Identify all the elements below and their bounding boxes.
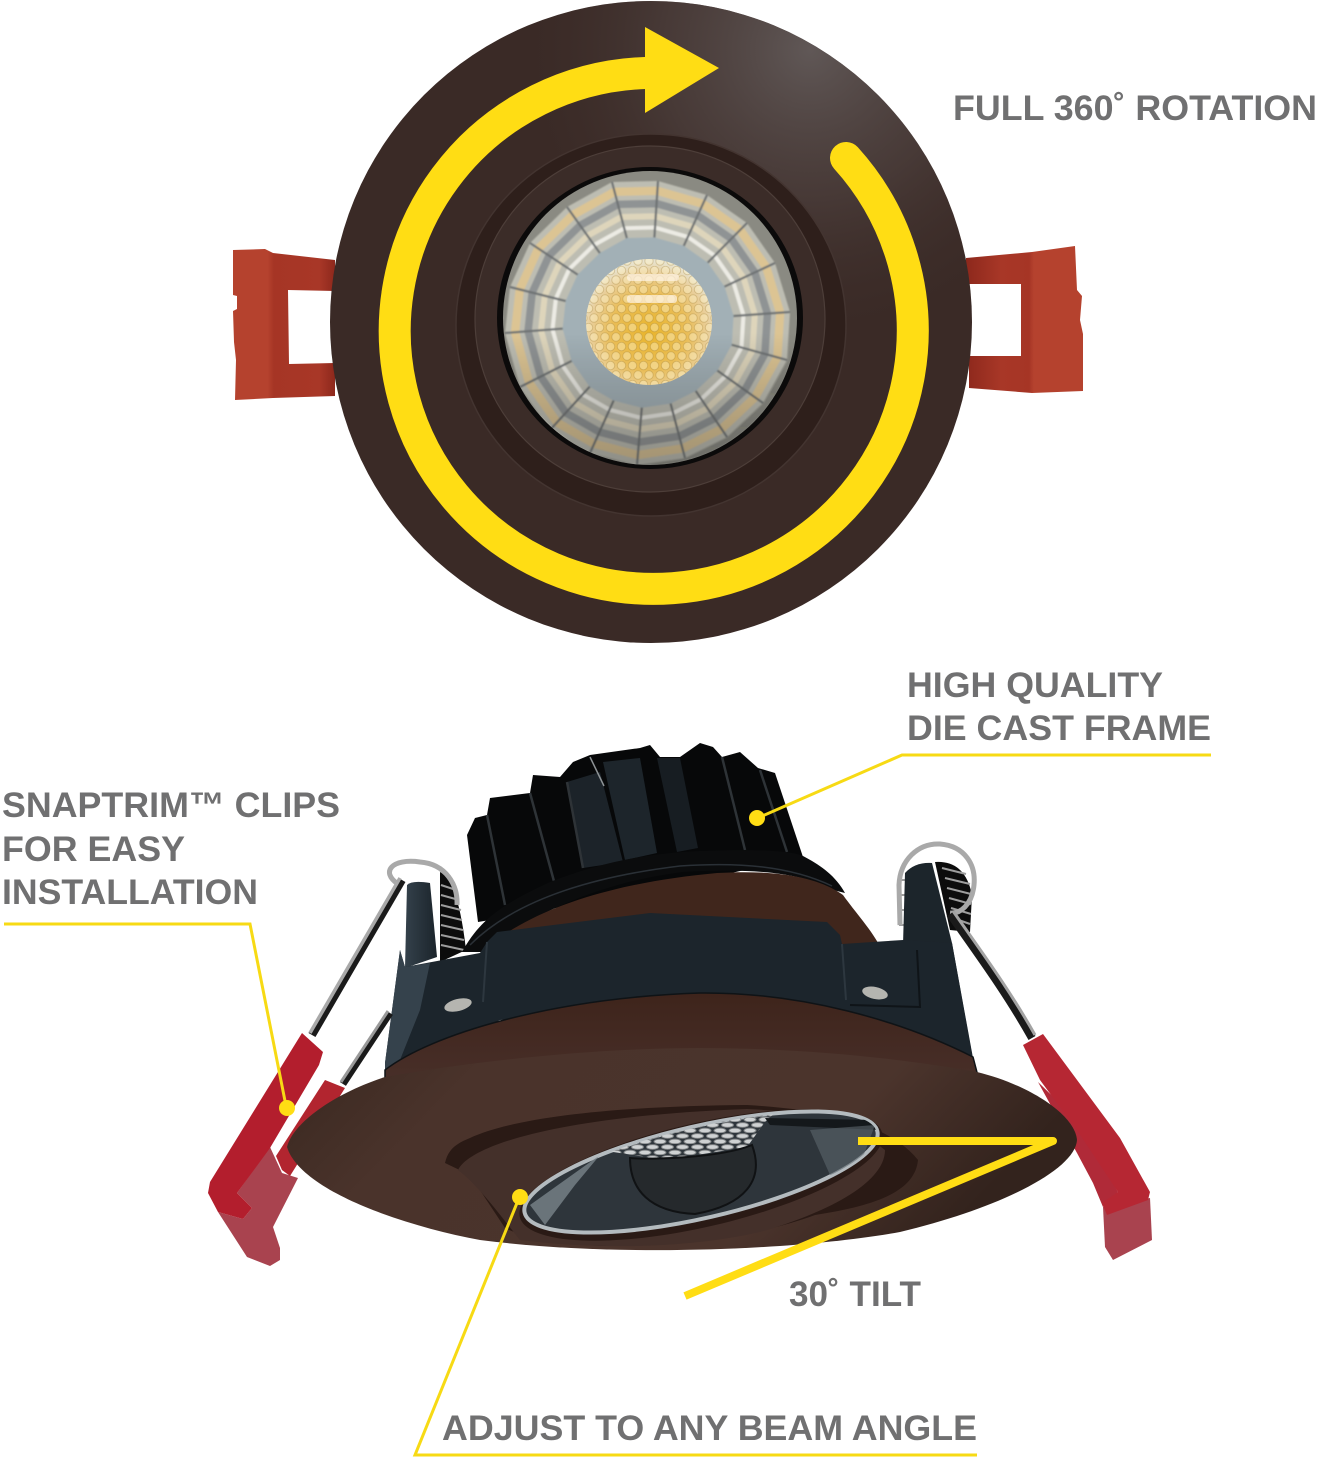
left spring coil: [389, 861, 466, 962]
right red clip, top view: [966, 246, 1083, 393]
heat sink fins: [487, 757, 787, 905]
housing: [385, 913, 973, 1078]
tilted lens: [520, 1109, 882, 1241]
callout: snaptrim clips: [4, 924, 295, 1116]
LED chip: [586, 259, 712, 385]
gimbal recess: [445, 1105, 918, 1246]
mounting post, right: [903, 863, 973, 1058]
inner gimbal ring: [456, 134, 846, 516]
brown dome: [490, 872, 890, 1000]
upper flange tier: [385, 993, 979, 1090]
product: angled view of downlight: [208, 743, 1152, 1268]
rotation arrow: [395, 27, 913, 589]
callout: die cast frame: [749, 755, 1211, 826]
spring wires: [310, 878, 1035, 1084]
label: snaptrim clips: FOR EASY: [2, 829, 185, 869]
label: snaptrim clips: INSTALLATION: [2, 872, 258, 912]
main trim flange: [287, 1048, 1077, 1250]
label: rotation: FULL 360˚ ROTATION: [953, 88, 1317, 128]
mounting post, left: [405, 882, 437, 968]
right spring coil: [899, 844, 974, 932]
lens with reflector: [497, 167, 803, 469]
trim disc: [330, 1, 972, 643]
callout: 30 degree tilt: [685, 1141, 1053, 1296]
label: beam angle: ADJUST TO ANY BEAM ANGLE: [442, 1408, 977, 1448]
left red clip, top view: [233, 249, 335, 400]
left red spring clip: [208, 1033, 345, 1266]
label: die cast frame: DIE CAST FRAME: [907, 708, 1211, 748]
heat sink: [467, 743, 803, 922]
label: snaptrim clips: SNAPTRIM™ CLIPS: [2, 785, 340, 825]
label: die cast frame: HIGH QUALITY: [907, 665, 1163, 705]
right red spring clip: [1023, 1034, 1152, 1260]
callout: beam angle: [415, 1189, 977, 1455]
black collar: [462, 850, 845, 952]
label: snaptrim clips: [2, 785, 340, 912]
label: tilt: 30˚ TILT: [789, 1274, 921, 1314]
product: top view of downlight: [233, 1, 1083, 643]
housing screws: [443, 984, 889, 1014]
label: die cast frame: [907, 665, 1211, 748]
